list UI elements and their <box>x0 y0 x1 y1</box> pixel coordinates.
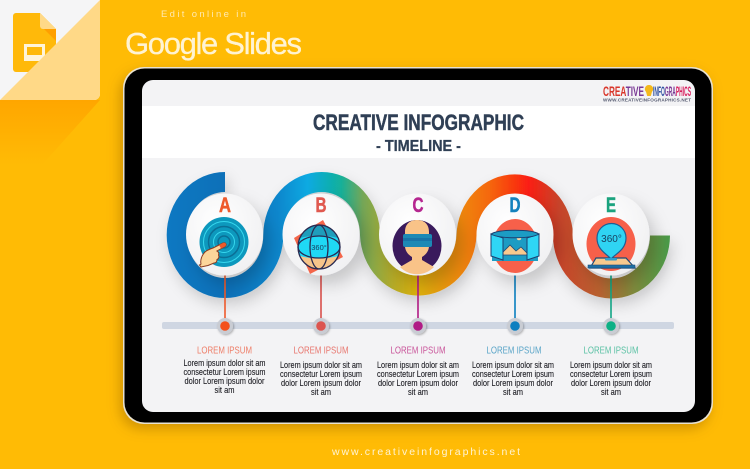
letter C: C <box>412 194 424 217</box>
icon: 360 map pin <box>586 217 636 271</box>
logo: CREATIVE <box>603 83 644 99</box>
corner badge: Google Slides icon <box>0 0 100 165</box>
letter B: B <box>316 194 326 217</box>
text block D: LOREM IPSUM <box>486 346 542 356</box>
connector lines <box>225 275 611 325</box>
text block D: dolor Lorem ipsum dolor <box>473 378 553 388</box>
text block C: consectetur Lorem ipsum <box>377 369 459 379</box>
icon: VR headset person <box>392 220 442 274</box>
marker B <box>313 318 329 334</box>
icon: bulb <box>645 85 653 96</box>
text block A: Lorem ipsum dolor sit am <box>184 358 266 368</box>
text block C: sit am <box>408 387 428 397</box>
text block C: dolor Lorem ipsum dolor <box>378 378 458 388</box>
marker C <box>410 318 426 334</box>
text block D: Lorem ipsum dolor sit am <box>472 360 554 370</box>
letter A: A <box>219 194 231 217</box>
text block A <box>184 346 266 395</box>
text block C <box>377 346 459 397</box>
subtitle: - TIMELINE - <box>376 138 461 155</box>
text block B: sit am <box>311 387 331 397</box>
heading: edit online in: Edit online in <box>161 9 246 20</box>
timeline ribbon <box>177 182 660 288</box>
timeline bar <box>162 322 674 329</box>
text block A: dolor Lorem ipsum dolor <box>184 376 264 386</box>
text block E: consectetur Lorem ipsum <box>570 369 652 379</box>
icon: 360 globe: 360° <box>311 243 327 252</box>
logo <box>603 83 691 102</box>
text block D <box>472 346 554 397</box>
letter E: E <box>606 194 616 217</box>
tablet frame <box>123 67 713 424</box>
text block B: Lorem ipsum dolor sit am <box>280 360 362 370</box>
text block E: sit am <box>601 387 621 397</box>
text block E: dolor Lorem ipsum dolor <box>571 378 651 388</box>
footer website: www.creativeinfographics.net <box>331 446 520 458</box>
marker A <box>217 318 233 334</box>
title: CREATIVE INFOGRAPHIC <box>313 110 524 135</box>
icon: panorama screen <box>491 219 539 273</box>
text block C: LOREM IPSUM <box>390 346 446 356</box>
tablet screen <box>142 80 695 412</box>
text block A: consectetur Lorem ipsum <box>184 367 266 377</box>
icon: touch target <box>200 217 248 267</box>
text block B: LOREM IPSUM <box>294 346 348 356</box>
text block E: LOREM IPSUM <box>584 346 638 356</box>
text block B <box>280 346 362 397</box>
text block D: sit am <box>503 387 523 397</box>
text block B: consectetur Lorem ipsum <box>280 369 362 379</box>
letter D: D <box>510 194 520 217</box>
logo: WWW.CREATIVEINFOGRAPHICS.NET <box>603 98 691 102</box>
discs <box>186 194 650 276</box>
text block C: Lorem ipsum dolor sit am <box>377 360 459 370</box>
text block D: consectetur Lorem ipsum <box>472 369 554 379</box>
icon: 360 globe <box>294 220 343 274</box>
text block E: Lorem ipsum dolor sit am <box>570 360 652 370</box>
marker D <box>507 318 523 334</box>
marker E <box>603 318 619 334</box>
icon: 360 map pin: 360° <box>601 234 622 245</box>
logo: INFOGRAPHICS <box>653 83 691 99</box>
text block A: sit am <box>214 385 235 395</box>
text block E <box>570 346 652 397</box>
text block B: dolor Lorem ipsum dolor <box>281 378 361 388</box>
text block A: LOREM IPSUM <box>197 346 252 356</box>
heading: Google Slides: Google Slides <box>125 26 302 61</box>
